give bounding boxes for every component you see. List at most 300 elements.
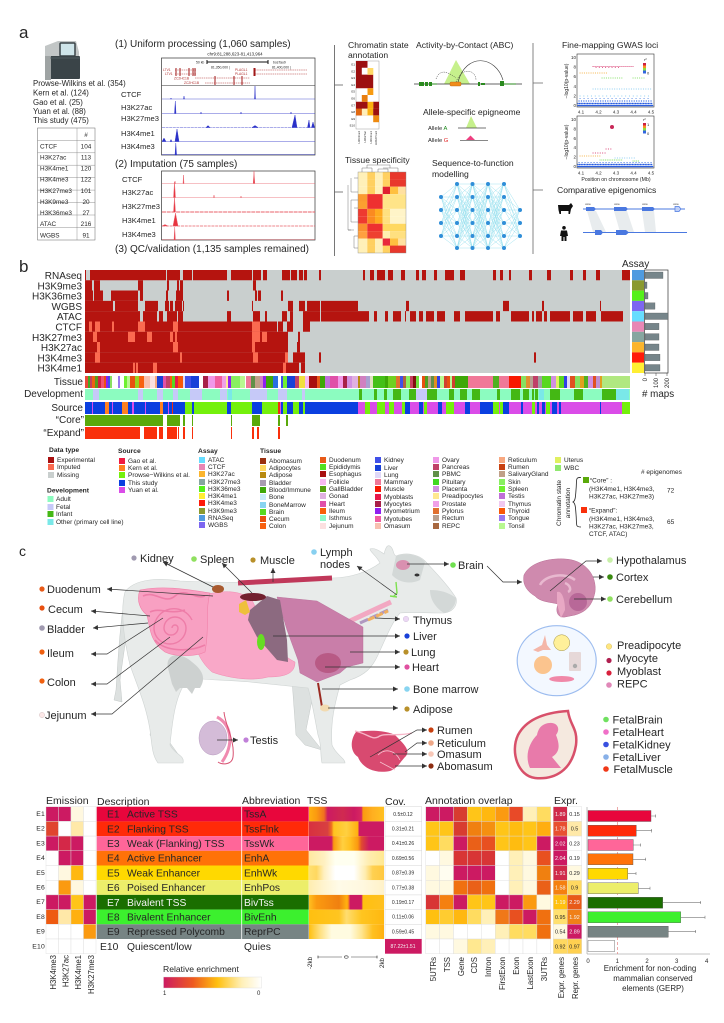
- table: state descriptions: Quiescent/low: [127, 942, 192, 953]
- heatmap: emission: E7: [36, 899, 45, 906]
- table: state descriptions: BivEnh: [244, 912, 277, 924]
- genome browser: uniform processing tracks: LTV1: [163, 68, 171, 72]
- diagram: allele-specific epigenome: Allele A: [428, 126, 447, 132]
- heatmap: expression: 0.19: [569, 856, 580, 862]
- illustration: rumen stomach: [352, 731, 412, 772]
- table: sample counts by assay: 27: [82, 210, 90, 217]
- heatmap: chromatin state annotation: E9: [351, 117, 355, 121]
- table: sample counts by assay: [38, 128, 95, 240]
- legend: tissue: Heart: [329, 501, 345, 508]
- heatmap: emission: E6: [36, 884, 45, 892]
- chart: manhattan plot bottom: 4.4: [630, 170, 637, 176]
- annotation strip: tissue: [85, 376, 630, 388]
- column headers: Cov.: [385, 796, 406, 808]
- table: state descriptions: E8: [107, 912, 120, 924]
- legend: tissue: Thymus: [508, 501, 532, 508]
- track labels: uniform processing: H3K4me3: [121, 142, 155, 151]
- legend: tissue: Spleen: [508, 486, 529, 493]
- illustration: cow anatomy: [114, 546, 456, 763]
- heatmap: TSS enrichment: -2kb: [307, 956, 314, 969]
- heatmap: emission: H3K27ac: [62, 955, 70, 987]
- legend: chromatin state annotation sets: [556, 469, 683, 538]
- legend: assay: Assay: [198, 448, 218, 455]
- legend: tissue: Adipocytes: [269, 465, 302, 472]
- legend: tissue: GallBladder: [329, 486, 364, 493]
- tissue labels: Cecum: [48, 604, 83, 616]
- table: state descriptions: Bivalent Enhancer: [127, 912, 211, 924]
- genome browser: uniform processing tracks: bosTau9: [273, 60, 286, 64]
- legend: assay: H3K9me3: [208, 508, 237, 515]
- legend: tissue: Tissue: [260, 448, 281, 455]
- chart: manhattan plot bottom: −log10(p-value): [564, 124, 570, 159]
- diagram: comparative epigenomics tracks: core: [673, 202, 679, 206]
- heatmap: expression: 2.29: [569, 900, 580, 906]
- legend: tissue: Testis: [508, 493, 525, 500]
- source study list: [33, 79, 126, 125]
- heading: allele-specific epigenome: Allele-specific epigneome: [423, 107, 521, 117]
- heatmap: emission: E10: [32, 943, 45, 950]
- heatmap row labels: [32, 271, 82, 375]
- heatmap: expression: 1.78: [555, 827, 566, 833]
- legend: tissue: Omasum: [384, 523, 410, 530]
- chart: manhattan plot top: 4.1: [578, 110, 585, 114]
- heatmap: expression: 0.97: [569, 944, 580, 950]
- heatmap: chromatin state annotation: H3K4me1: [369, 131, 373, 143]
- legend: tissue: Prostate: [442, 501, 467, 508]
- chart: number of maps per assay: 100: [654, 377, 660, 388]
- table: state descriptions: E2: [107, 824, 120, 835]
- far legs and tail: [114, 590, 322, 754]
- legend: tissue: Myometrium: [384, 508, 420, 515]
- chart: manhattan plot top: 4.3: [613, 110, 620, 114]
- imputed data segments: [89, 327, 288, 368]
- heart: [315, 653, 341, 673]
- legend: tissue: Pituitary: [442, 479, 466, 486]
- column headers: [46, 795, 578, 808]
- legend: tissue: Myocytes: [384, 501, 412, 508]
- lymph node: [390, 582, 397, 597]
- chart: number of maps per assay: # maps: [642, 389, 674, 400]
- legend: tissue: Reticulum: [508, 457, 537, 464]
- legend: tissue: Skin: [508, 479, 521, 486]
- bar chart: GERP enrichment: Enrichment for non-coding: [604, 964, 696, 973]
- table: state descriptions: [97, 807, 309, 953]
- legend: development: Development: [47, 488, 90, 494]
- tissue labels: Ileum: [47, 648, 74, 660]
- table: state descriptions: EnhWk: [244, 868, 278, 879]
- legend: tissue: Muscle: [384, 486, 405, 493]
- table: sample counts by assay: WGBS: [40, 232, 60, 240]
- chart: manhattan plot top: 6: [573, 74, 576, 79]
- bar chart: GERP enrichment: 0: [586, 959, 590, 965]
- heatmap: expression: 1.91: [555, 871, 566, 877]
- chart: manhattan plot bottom: 4.2: [595, 170, 602, 176]
- heatmap: annotation overlap: 5UTRs: [429, 957, 438, 981]
- heatmap: expression: 0.29: [569, 871, 580, 877]
- bar chart: GERP enrichment: 1: [616, 959, 620, 965]
- annotation strip labels: “Core”: [56, 415, 84, 426]
- table: state descriptions: Weak (Flanking) TSS: [127, 839, 225, 850]
- track labels: imputation: H3K27ac: [122, 188, 153, 197]
- heatmap: annotation overlap: [426, 807, 551, 990]
- bar chart: GERP enrichment: 4: [705, 959, 709, 965]
- heatmap: chromatin state annotation: H3K27me3: [374, 131, 378, 145]
- bar chart: GERP enrichment: [586, 807, 710, 993]
- chart: manhattan plot top: 4.2: [595, 110, 602, 114]
- table: genome coverage: 0.19±0.17: [392, 900, 414, 906]
- annotation strip: core states: [85, 415, 288, 426]
- legend: assay: H3K36me3: [208, 486, 241, 493]
- legend: tissue: Abomasum: [269, 458, 302, 465]
- tissue labels: Abomasum: [437, 761, 493, 773]
- table: genome coverage: 0.69±0.56: [392, 856, 414, 862]
- heatmap: data type per assay: [85, 270, 630, 373]
- illustration: testis: [199, 712, 233, 764]
- heatmap row labels: RNAseq: [45, 271, 82, 282]
- legend: assay: H3K27ac: [208, 471, 235, 478]
- heatmap: expression: 0.23: [569, 841, 580, 847]
- legend: tissue: Preadipocytes: [442, 493, 484, 500]
- legend: tissue: Myoblasts: [384, 494, 414, 501]
- legend: tissue: Myotubes: [384, 516, 413, 523]
- heatmap: annotation overlap: FirstExon: [498, 957, 507, 990]
- chart: manhattan plot top: −log10(p-value): [564, 63, 570, 98]
- tissue labels: Rumen: [437, 725, 472, 737]
- panel label a: a: [19, 23, 29, 42]
- chart: manhattan plot bottom: 4.1: [578, 170, 585, 176]
- legend: assay: RNASeq: [208, 515, 234, 522]
- annotation strip: development: [85, 389, 630, 400]
- tissue labels: Spleen: [200, 554, 234, 566]
- chart: manhattan plot bottom: 6: [573, 136, 576, 141]
- legend: assay: H3K4me1: [208, 493, 237, 500]
- diagram: neural network: [439, 182, 522, 250]
- legend: tissue: Bladder: [269, 480, 292, 487]
- table: genome coverage: 87.22±1.51: [390, 944, 416, 950]
- annotation strip: source: [85, 402, 630, 414]
- legend: source: This study: [128, 480, 158, 487]
- tissue labels: FetalLiver: [612, 752, 661, 764]
- legend: tissue: Placenta: [442, 486, 468, 493]
- legend: tissue: Blood/Immune: [269, 487, 311, 494]
- table: sample counts by assay: 216: [81, 221, 92, 228]
- heatmap: expression: 0.9: [571, 886, 578, 892]
- legend: chromatin state annotation sets: (H3K4me1, H3K4me3,: [589, 516, 655, 523]
- diagram: comparative epigenomics tracks: [583, 202, 687, 235]
- tissue labels: [39, 547, 687, 776]
- heatmap: emission: E4: [36, 855, 45, 862]
- legend: assay: H3K27me3: [208, 479, 241, 486]
- track labels: uniform processing: H3K4me1: [121, 129, 155, 138]
- table: state descriptions: E6: [107, 883, 120, 894]
- table: state descriptions: E5: [107, 868, 120, 879]
- tissue labels: Heart: [412, 662, 439, 674]
- heatmap: emission: [32, 807, 96, 994]
- heading: imputation: (2) Imputation (75 samples): [115, 159, 237, 170]
- legend: tissue: Gonad: [329, 493, 349, 500]
- legend: tissue: Duodenum: [329, 457, 361, 464]
- legend: development: Fetal: [56, 504, 71, 511]
- diagram: comparative epigenomics tracks: core: [614, 202, 620, 206]
- table: sample counts by assay: CTCF: [40, 144, 57, 150]
- spleen dark: [240, 593, 266, 601]
- legend: development: Infant: [56, 511, 72, 518]
- table: sample counts by assay: H3K36me3: [40, 210, 72, 217]
- heatmap: annotation overlap: 3UTRs: [540, 957, 549, 981]
- table: genome coverage: 0.5±0.12: [393, 812, 413, 818]
- chart: manhattan plot top: 0: [647, 70, 650, 76]
- chart: manhattan plot bottom: r²: [643, 117, 646, 122]
- table: state descriptions: TssFlnk: [244, 824, 280, 835]
- diagram: allele-specific epigenome: [428, 116, 488, 144]
- diagram: comparative epigenomics tracks: core: [642, 202, 648, 206]
- tissue labels: Omasum: [437, 749, 482, 761]
- legend: chromatin state annotation sets: 65: [667, 519, 675, 526]
- track labels: imputation: [122, 175, 160, 239]
- tissue labels: FetalKidney: [612, 740, 671, 752]
- track labels: uniform processing: [121, 90, 159, 151]
- table: state descriptions: E3: [107, 839, 120, 850]
- legend: tissue: Pancreas: [442, 464, 470, 471]
- chart: manhattan plot top: 2: [573, 93, 576, 98]
- legend: tissue: Tonsil: [508, 523, 525, 530]
- track labels: imputation: H3K4me3: [122, 230, 156, 239]
- chart: number of maps per assay: 200: [665, 377, 671, 388]
- legend: tissue: Rumen: [508, 464, 529, 471]
- legend: source: Gao et al.: [128, 458, 156, 465]
- chart: manhattan plot top: 8: [573, 65, 576, 70]
- table: state descriptions: E9: [107, 927, 120, 938]
- heatmap: chromatin state annotation: E8: [351, 110, 355, 114]
- table: sample counts by assay: 120: [81, 166, 92, 172]
- genome browser: uniform processing tracks: 81,400,000 |: [272, 66, 291, 70]
- legend: tissue: Rectum: [442, 515, 464, 522]
- tissue labels: FetalMuscle: [614, 764, 673, 776]
- legend: assay: CTCF: [208, 464, 225, 471]
- heatmap: expression: 1.58: [555, 886, 566, 892]
- chart: manhattan plot top: r²: [644, 57, 647, 62]
- legend: chromatin state annotation sets: # epigenomes: [641, 469, 683, 476]
- legend: chromatin state annotation sets: 72: [667, 488, 675, 494]
- diagram: activity by contact: [414, 60, 522, 86]
- heatmap: annotation overlap: Gene: [457, 957, 466, 976]
- table: state descriptions: Bivalent TSS: [127, 898, 186, 909]
- track labels: uniform processing: H3K27ac: [121, 103, 152, 112]
- heatmap: emission: H3K4me1: [74, 955, 83, 990]
- heatmap: chromatin state annotation: H3K27ac: [363, 130, 367, 143]
- legend: chromatin state annotation sets: (H3K4me1, H3K4me3,: [589, 486, 655, 493]
- annotation strip labels: Tissue: [54, 377, 83, 388]
- heading: chromatin state annotation: Chromatin state: [348, 40, 409, 50]
- legend: tissue: PBMC: [442, 471, 461, 478]
- heatmap: TSS enrichment: 2kb: [379, 957, 386, 968]
- legend: chromatin state annotation sets: annotation: [565, 487, 572, 518]
- heatmap: expression: 0.95: [555, 915, 566, 921]
- genome browser: uniform processing tracks: ZC2HC1B: [184, 81, 200, 85]
- genome browser: imputation tracks: [162, 171, 315, 240]
- tissue labels: Liver: [413, 631, 437, 643]
- legend: tissue: Uterus: [564, 457, 584, 464]
- heatmap row labels: H3K27me3: [32, 333, 82, 344]
- heatmap: emission: E1: [36, 811, 45, 818]
- tissue labels: Jejunum: [45, 710, 87, 722]
- annotation strip labels: [24, 377, 84, 439]
- legend: tissue: Follicle: [329, 479, 350, 486]
- bar chart: GERP enrichment: elements (GERP): [622, 984, 684, 993]
- legend: relative enrichment: 1: [163, 991, 167, 997]
- table: state descriptions: Active Enhancer: [127, 854, 203, 865]
- heatmap: chromatin state annotation: E3: [351, 76, 355, 80]
- annotation strip: expand states: [85, 427, 280, 439]
- legend: chromatin state annotation sets: “Core” :: [590, 478, 612, 484]
- chart: manhattan plot top: 0: [573, 103, 576, 108]
- lungs: [277, 597, 363, 682]
- heatmap: emission: E8: [36, 914, 45, 921]
- heatmap: annotation overlap: Exon: [512, 957, 521, 975]
- table: state descriptions: Poised Enhancer: [127, 883, 206, 894]
- legend: relative enrichment: [163, 964, 262, 997]
- cow body: [123, 546, 456, 763]
- tissue labels: Reticulum: [437, 738, 486, 750]
- heatmap: emission: E2: [36, 826, 45, 833]
- tissue labels: REPC: [617, 678, 648, 690]
- chart: number of maps per assay: [622, 259, 674, 400]
- table: state descriptions: E4: [107, 854, 120, 865]
- tissue labels: Bone marrow: [413, 684, 478, 696]
- heatmap: chromatin state annotation: E4: [351, 83, 355, 87]
- heatmap: emission: H3K4me3: [49, 955, 58, 990]
- bar chart: GERP enrichment: 2: [645, 959, 649, 965]
- legend: source: Kern et al.: [128, 465, 158, 472]
- table: sample counts by assay: 91: [82, 232, 90, 240]
- legend: tissue: Pylorus: [442, 508, 464, 515]
- heatmap row labels: H3K27ac: [41, 343, 82, 354]
- annotation strip labels: “Expand”: [43, 428, 84, 439]
- table: state descriptions: ReprPC: [244, 927, 281, 938]
- heading: uniform processing: (1) Uniform processing (1,060 samples): [115, 39, 291, 50]
- chart: manhattan plot top: 4.4: [630, 110, 637, 114]
- tissue labels: Testis: [250, 735, 279, 747]
- column headers: Emission: [46, 795, 89, 807]
- table: sample counts by assay: H3K9me3: [40, 199, 69, 206]
- heatmap: chromatin state annotation: E1: [351, 62, 355, 66]
- genome browser: uniform processing tracks: chr9:81,288,623-81,413,964: [207, 52, 263, 56]
- genome browser: uniform processing tracks: PLAGL1: [235, 68, 248, 72]
- source study list: Yuan et al. (88): [33, 107, 86, 116]
- column headers: Description: [97, 796, 150, 808]
- heatmap: emission: E5: [36, 870, 45, 877]
- tissue labels: Kidney: [140, 553, 174, 565]
- legend: chromatin state annotation sets: “Expand”:: [589, 508, 617, 514]
- diagram: comparative epigenomics tracks: core: [585, 202, 591, 206]
- genome browser: uniform processing tracks: [162, 52, 315, 155]
- track labels: imputation: CTCF: [122, 175, 143, 184]
- legend: source: [118, 448, 190, 494]
- table: state descriptions: EnhA: [244, 854, 269, 865]
- yellow pancreas: [239, 600, 250, 615]
- heatmap: expression: 0.5: [571, 827, 578, 833]
- table: genome coverage: 0.87±0.39: [392, 871, 414, 877]
- heatmap: emission: E3: [36, 840, 45, 847]
- table: sample counts by assay: 104: [81, 144, 92, 150]
- icon: cow: [558, 203, 573, 214]
- tissue labels: Cerebellum: [616, 594, 672, 606]
- table: sample counts by assay: 122: [81, 176, 92, 184]
- intestines: [138, 588, 210, 656]
- heatmap: expression: 2.89: [569, 930, 580, 936]
- table: state descriptions: E1: [107, 810, 120, 821]
- head patches: [392, 554, 456, 613]
- table: sample counts by assay: #: [84, 132, 88, 139]
- heatmap row labels: H3K36me3: [32, 292, 82, 303]
- genome browser: uniform processing tracks: PLAGL1: [235, 72, 248, 76]
- legend: development: Adult: [56, 496, 71, 503]
- table: state descriptions: E10: [100, 942, 119, 953]
- track labels: imputation: H3K27me3: [122, 202, 160, 211]
- icon: person: [560, 226, 568, 241]
- heatmap: annotation overlap: LastExon: [526, 957, 535, 990]
- tissue arrows: [91, 561, 606, 766]
- chart: manhattan plot bottom: 10: [571, 117, 576, 122]
- legend: chromatin state annotation sets: CTCF, ATAC): [589, 531, 627, 538]
- legend: source: Yuan et al.: [128, 487, 159, 494]
- heatmap: annotation overlap: Intron: [484, 957, 493, 977]
- bar chart: GERP enrichment: mammalian conserved: [613, 974, 693, 983]
- table: state descriptions: Weak Enhancer: [127, 868, 201, 879]
- panel label b: b: [19, 257, 28, 276]
- table: genome coverage: 0.31±0.21: [392, 826, 414, 832]
- heading: activity by contact: Activity-by-Contact (ABC): [416, 40, 514, 50]
- annotation strip labels: Source: [51, 403, 83, 414]
- source study list: Kern et al. (124): [33, 88, 89, 98]
- table: state descriptions: E7: [107, 898, 120, 909]
- heatmap: expression: 0.54: [555, 930, 566, 936]
- heading: tissue specificity: Tissue specificity: [345, 155, 410, 165]
- heatmap: expression: 0.92: [555, 944, 566, 950]
- udder: [168, 655, 203, 694]
- heatmap row labels: H3K4me1: [38, 364, 82, 375]
- tissue labels: Cortex: [616, 572, 649, 584]
- legend: relative enrichment: Relative enrichment: [163, 964, 240, 974]
- heatmap: emission: H3K27me3: [87, 955, 96, 994]
- table: state descriptions: Repressed Polycomb: [127, 927, 225, 938]
- genome browser: uniform processing tracks: LTV1: [165, 72, 173, 76]
- tissue labels: Duodenum: [47, 584, 101, 596]
- throat, thymus: [350, 602, 391, 621]
- legend: tissue: Lung: [384, 472, 399, 479]
- heatmap: tissue specificity: [348, 165, 406, 253]
- legend: tissue: REPC: [442, 523, 460, 530]
- legend: tissue: Isthmus: [329, 515, 353, 522]
- tissue labels: Muscle: [260, 555, 295, 567]
- diagram: allele-specific epigenome: Allele G: [428, 138, 449, 144]
- chart: manhattan plot bottom: 4.5: [648, 170, 655, 176]
- tissue labels: Hypothalamus: [616, 555, 687, 567]
- legend: tissue: Mammary: [384, 479, 414, 486]
- chart: manhattan plot bottom: [564, 116, 655, 183]
- tissue labels: Brain: [458, 560, 484, 572]
- chart: manhattan plot bottom: 8: [573, 126, 576, 131]
- heatmap: chromatin state annotation: [350, 61, 379, 145]
- legend: data type: Missing: [57, 472, 79, 479]
- heatmap: chromatin state annotation: H3K4me3: [357, 131, 361, 143]
- column headers: Abbreviation: [242, 795, 301, 807]
- heatmap: annotation overlap: TSS: [443, 957, 452, 972]
- heading: sequence to function: Sequence-to-function: [432, 158, 514, 168]
- stomach: [195, 592, 295, 679]
- legend: tissue: Esophagus: [329, 471, 362, 478]
- table: state descriptions: Quies: [244, 942, 271, 953]
